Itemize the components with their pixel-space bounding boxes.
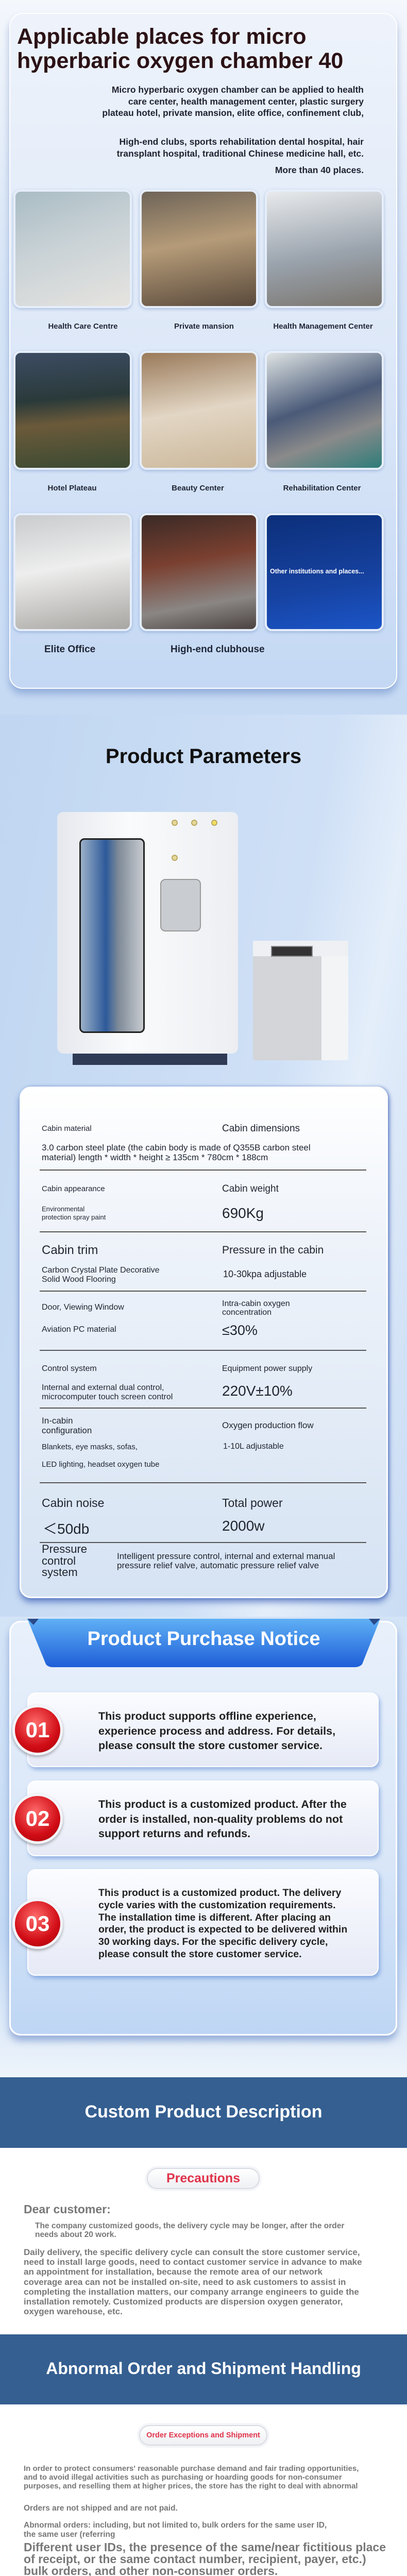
badge 02: 02 [26, 1806, 49, 1831]
text: delivery note: The company customized goods, the delivery cycle may be longer, after the order [35, 2222, 344, 2230]
text: daily delivery paragraph: Daily delivery, the specific delivery cycle can consult the store customer service, [24, 2247, 360, 2257]
text: delivery note: needs about 20 work. [35, 2230, 116, 2239]
text: abnormal orders: the same user (referring [24, 2530, 115, 2539]
text: daily delivery paragraph: completing the installation matters, our company arrange engineers to guide the [24, 2287, 359, 2297]
row: trim / pressure [42, 1243, 324, 1284]
text: dear customer: Dear customer: [24, 2202, 111, 2216]
row: pressure control system [42, 1543, 335, 1579]
row: configuration / oxygen flow: Oxygen production flow [222, 1420, 314, 1430]
row: appearance / weight: Environmental [42, 1205, 84, 1213]
intro text: more than 40: More than 40 places. [275, 165, 364, 175]
photo: health management [265, 190, 384, 308]
text: abnormal orders: Abnormal orders: including, but not limited to, bulk orders for the same user ID, [24, 2521, 327, 2530]
band: abnormal order [0, 2334, 407, 2404]
text: daily delivery paragraph: need to install large goods, need to contact customer service in advance to make [24, 2257, 362, 2267]
row: pressure control system: system [42, 1566, 78, 1579]
section 2 background [0, 715, 407, 1617]
notice card 3 [27, 1869, 379, 1976]
band: abnormal order: Abnormal Order and Shipment Handling [46, 2359, 361, 2378]
product image: chamber [57, 812, 238, 1065]
notice card 3: order, the product is expected to be delivered within [98, 1924, 347, 1935]
row: trim / pressure: Cabin trim [42, 1243, 98, 1257]
band: custom product description: Custom Product Description [85, 2102, 322, 2122]
row: cabin material / dimensions: Cabin dimensions [222, 1123, 300, 1134]
badge 01: 01 [26, 1718, 49, 1742]
intro text paragraph 1: plateau hotel, private mansion, elite office, confinement club, [102, 108, 364, 118]
label: hotel: Hotel Plateau [47, 484, 97, 493]
row: configuration / oxygen flow: LED lighting, headset oxygen tube [42, 1460, 160, 1469]
pill: order exceptions [139, 2425, 267, 2446]
row: pressure control system: pressure relief valve, automatic pressure relief valve [117, 1561, 319, 1570]
text: protection paragraph [24, 2464, 359, 2490]
photo: health care centre [13, 190, 132, 308]
text: abnormal orders [24, 2521, 327, 2539]
row: door / oxygen concentration: concentration [222, 1308, 272, 1317]
text: daily delivery paragraph: an appointment for installation, because the remote area of our network [24, 2267, 323, 2277]
row: cabin material / dimensions: 3.0 carbon steel plate (the cabin body is made of Q355B carbon steel [42, 1143, 311, 1153]
row: configuration / oxygen flow: Blankets, eye masks, sofas, [42, 1443, 138, 1451]
row: door / oxygen concentration [42, 1299, 290, 1338]
row: door / oxygen concentration: Intra-cabin oxygen [222, 1299, 290, 1308]
product image: oxygen machine [253, 941, 348, 1060]
tile: other institutions [265, 513, 384, 631]
panel: purchase notice [9, 1621, 397, 2036]
text: daily delivery paragraph: oxygen warehouse, etc. [24, 2307, 123, 2316]
intro text paragraph 1: Micro hyperbaric oxygen chamber can be applied to health [112, 84, 364, 95]
row: trim / pressure: 10-30kpa adjustable [223, 1269, 307, 1279]
intro text paragraph 1: care center, health management center, plastic surgery [128, 96, 364, 106]
section 1 background [0, 0, 407, 715]
badge 02 [12, 1793, 63, 1844]
text: protection paragraph: purposes, and reselling them at higher prices, the store has the right to deal with abnormal [24, 2482, 358, 2490]
row: configuration / oxygen flow [42, 1416, 314, 1469]
text: daily delivery paragraph [24, 2247, 362, 2316]
photo: clubhouse [140, 513, 258, 631]
row: appearance / weight: Cabin weight [222, 1183, 279, 1194]
photo: beauty [140, 351, 258, 470]
row: pressure control system: control [42, 1554, 76, 1567]
tile: other institutions: Other institutions and places... [270, 568, 364, 575]
text: daily delivery paragraph: coverage area can not be installed on-site, need to ask customers to assist in [24, 2277, 346, 2287]
pill: precautions: Precautions [166, 2171, 240, 2185]
band: custom product description [0, 2077, 407, 2148]
panel: parameters table [20, 1087, 388, 1598]
notice card 1: please consult the store customer service. [98, 1739, 323, 1752]
row: pressure control system: Pressure [42, 1543, 87, 1555]
section 3 background [0, 1617, 407, 2077]
row: control / power supply [42, 1364, 312, 1401]
text: delivery note [35, 2222, 344, 2239]
panel: applicable places [9, 13, 397, 689]
label: health care: Health Care Centre [48, 322, 118, 331]
text: not shipped: Orders are not shipped and are not paid. [24, 2504, 178, 2513]
notice card 3: 30 working days. For the specific delivery cycle, [98, 1936, 328, 1947]
text: protection paragraph: In order to protect consumers' reasonable purchase demand and fair trading opportunities, [24, 2464, 359, 2473]
photo: private mansion [140, 190, 258, 308]
heading: product parameters: Product Parameters [106, 745, 301, 768]
label: clubhouse: High-end clubhouse [171, 644, 265, 655]
notice card 3: This product is a customized product. The delivery [98, 1887, 341, 1899]
notice card 3: cycle varies with the customization requirements. [98, 1900, 336, 1911]
title: Applicable places for micro [17, 24, 307, 49]
text: protection paragraph: and to avoid illegal activities such as purchasing or hoarding goods for non-consumer [24, 2473, 342, 2482]
photo: hotel [13, 351, 132, 470]
notice card 2 [27, 1781, 379, 1856]
intro text paragraph 2: High-end clubs, sports rehabilitation dental hospital, hair [120, 137, 364, 147]
label: health management: Health Management Center [273, 322, 373, 331]
intro text paragraph 2: transplant hospital, traditional Chinese medicine hall, etc. [117, 148, 364, 159]
row: cabin material / dimensions [42, 1123, 311, 1162]
row: control / power supply: Internal and external dual control, [42, 1383, 164, 1392]
row: configuration / oxygen flow: 1-10L adjustable [223, 1442, 284, 1451]
row: noise / power: ＜50db [43, 1521, 89, 1537]
row: control / power supply: Control system [42, 1364, 97, 1373]
row: noise / power: 2000w [222, 1518, 265, 1534]
row: door / oxygen concentration: Door, Viewing Window [42, 1303, 124, 1312]
banner: product purchase notice: Product Purchase Notice [88, 1628, 320, 1650]
row: appearance / weight: protection spray paint [42, 1213, 106, 1221]
notice card 2: This product is a customized product. After the [98, 1798, 347, 1810]
badge 03 [12, 1899, 63, 1949]
row: cabin material / dimensions: material) length * width * height ≥ 135cm * 780cm * 188cm [42, 1153, 268, 1162]
badge 03: 03 [26, 1911, 49, 1936]
label: rehab: Rehabilitation Center [283, 484, 361, 493]
photo: rehab [265, 351, 384, 470]
row: door / oxygen concentration: Aviation PC material [42, 1325, 116, 1334]
title: hyperbaric oxygen chamber 40 [17, 48, 343, 73]
row: cabin material / dimensions: Cabin material [42, 1124, 92, 1133]
row: appearance / weight: Cabin appearance [42, 1184, 105, 1193]
intro text paragraph 1 [102, 84, 364, 118]
intro text paragraph 2 [116, 137, 364, 159]
row: trim / pressure: Solid Wood Flooring [42, 1275, 116, 1284]
text: different user ids [24, 2541, 386, 2576]
notice card 1: This product supports offline experience, [98, 1710, 316, 1722]
row: pressure control system: Intelligent pressure control, internal and external manual [117, 1551, 335, 1561]
row: configuration / oxygen flow: configuration [42, 1426, 92, 1435]
row: trim / pressure: Carbon Crystal Plate Decorative [42, 1266, 160, 1275]
text: different user ids: of receipt, or the same contact number, recipient, payer, etc.) [24, 2552, 366, 2566]
badge 01 [12, 1705, 63, 1755]
row: control / power supply: 220V±10% [222, 1383, 293, 1399]
notice card 3: The installation time is different. After placing an [98, 1912, 331, 1923]
row: noise / power [42, 1496, 283, 1537]
row: noise / power: Cabin noise [42, 1496, 104, 1510]
label: private mansion: Private mansion [174, 322, 234, 331]
pill: order exceptions: Order Exceptions and Shipment [146, 2431, 260, 2439]
banner: product purchase notice [27, 1619, 380, 1667]
label: elite office: Elite Office [44, 644, 95, 655]
row: control / power supply: Equipment power supply [222, 1364, 312, 1373]
row: control / power supply: microcomputer touch screen control [42, 1393, 173, 1401]
title [17, 24, 343, 73]
notice card 1: experience process and address. For details, [98, 1725, 335, 1737]
label: beauty: Beauty Center [172, 484, 224, 493]
row: appearance / weight [42, 1183, 279, 1221]
photo: office [13, 513, 132, 631]
text: daily delivery paragraph: installation remotely. Customized products are dispersion oxygen generator, [24, 2297, 343, 2307]
row: configuration / oxygen flow: In-cabin [42, 1416, 73, 1426]
row: noise / power: Total power [222, 1496, 283, 1510]
row: door / oxygen concentration: ≤30% [222, 1323, 258, 1338]
row: trim / pressure: Pressure in the cabin [222, 1244, 324, 1256]
notice card 3: please consult the store customer service. [98, 1948, 302, 1960]
pill: precautions [147, 2168, 260, 2189]
notice card 1 [27, 1692, 379, 1767]
notice card 2: support returns and refunds. [98, 1827, 250, 1840]
row: appearance / weight: 690Kg [222, 1205, 264, 1221]
notice card 2: order is installed, non-quality problems do not [98, 1812, 343, 1825]
